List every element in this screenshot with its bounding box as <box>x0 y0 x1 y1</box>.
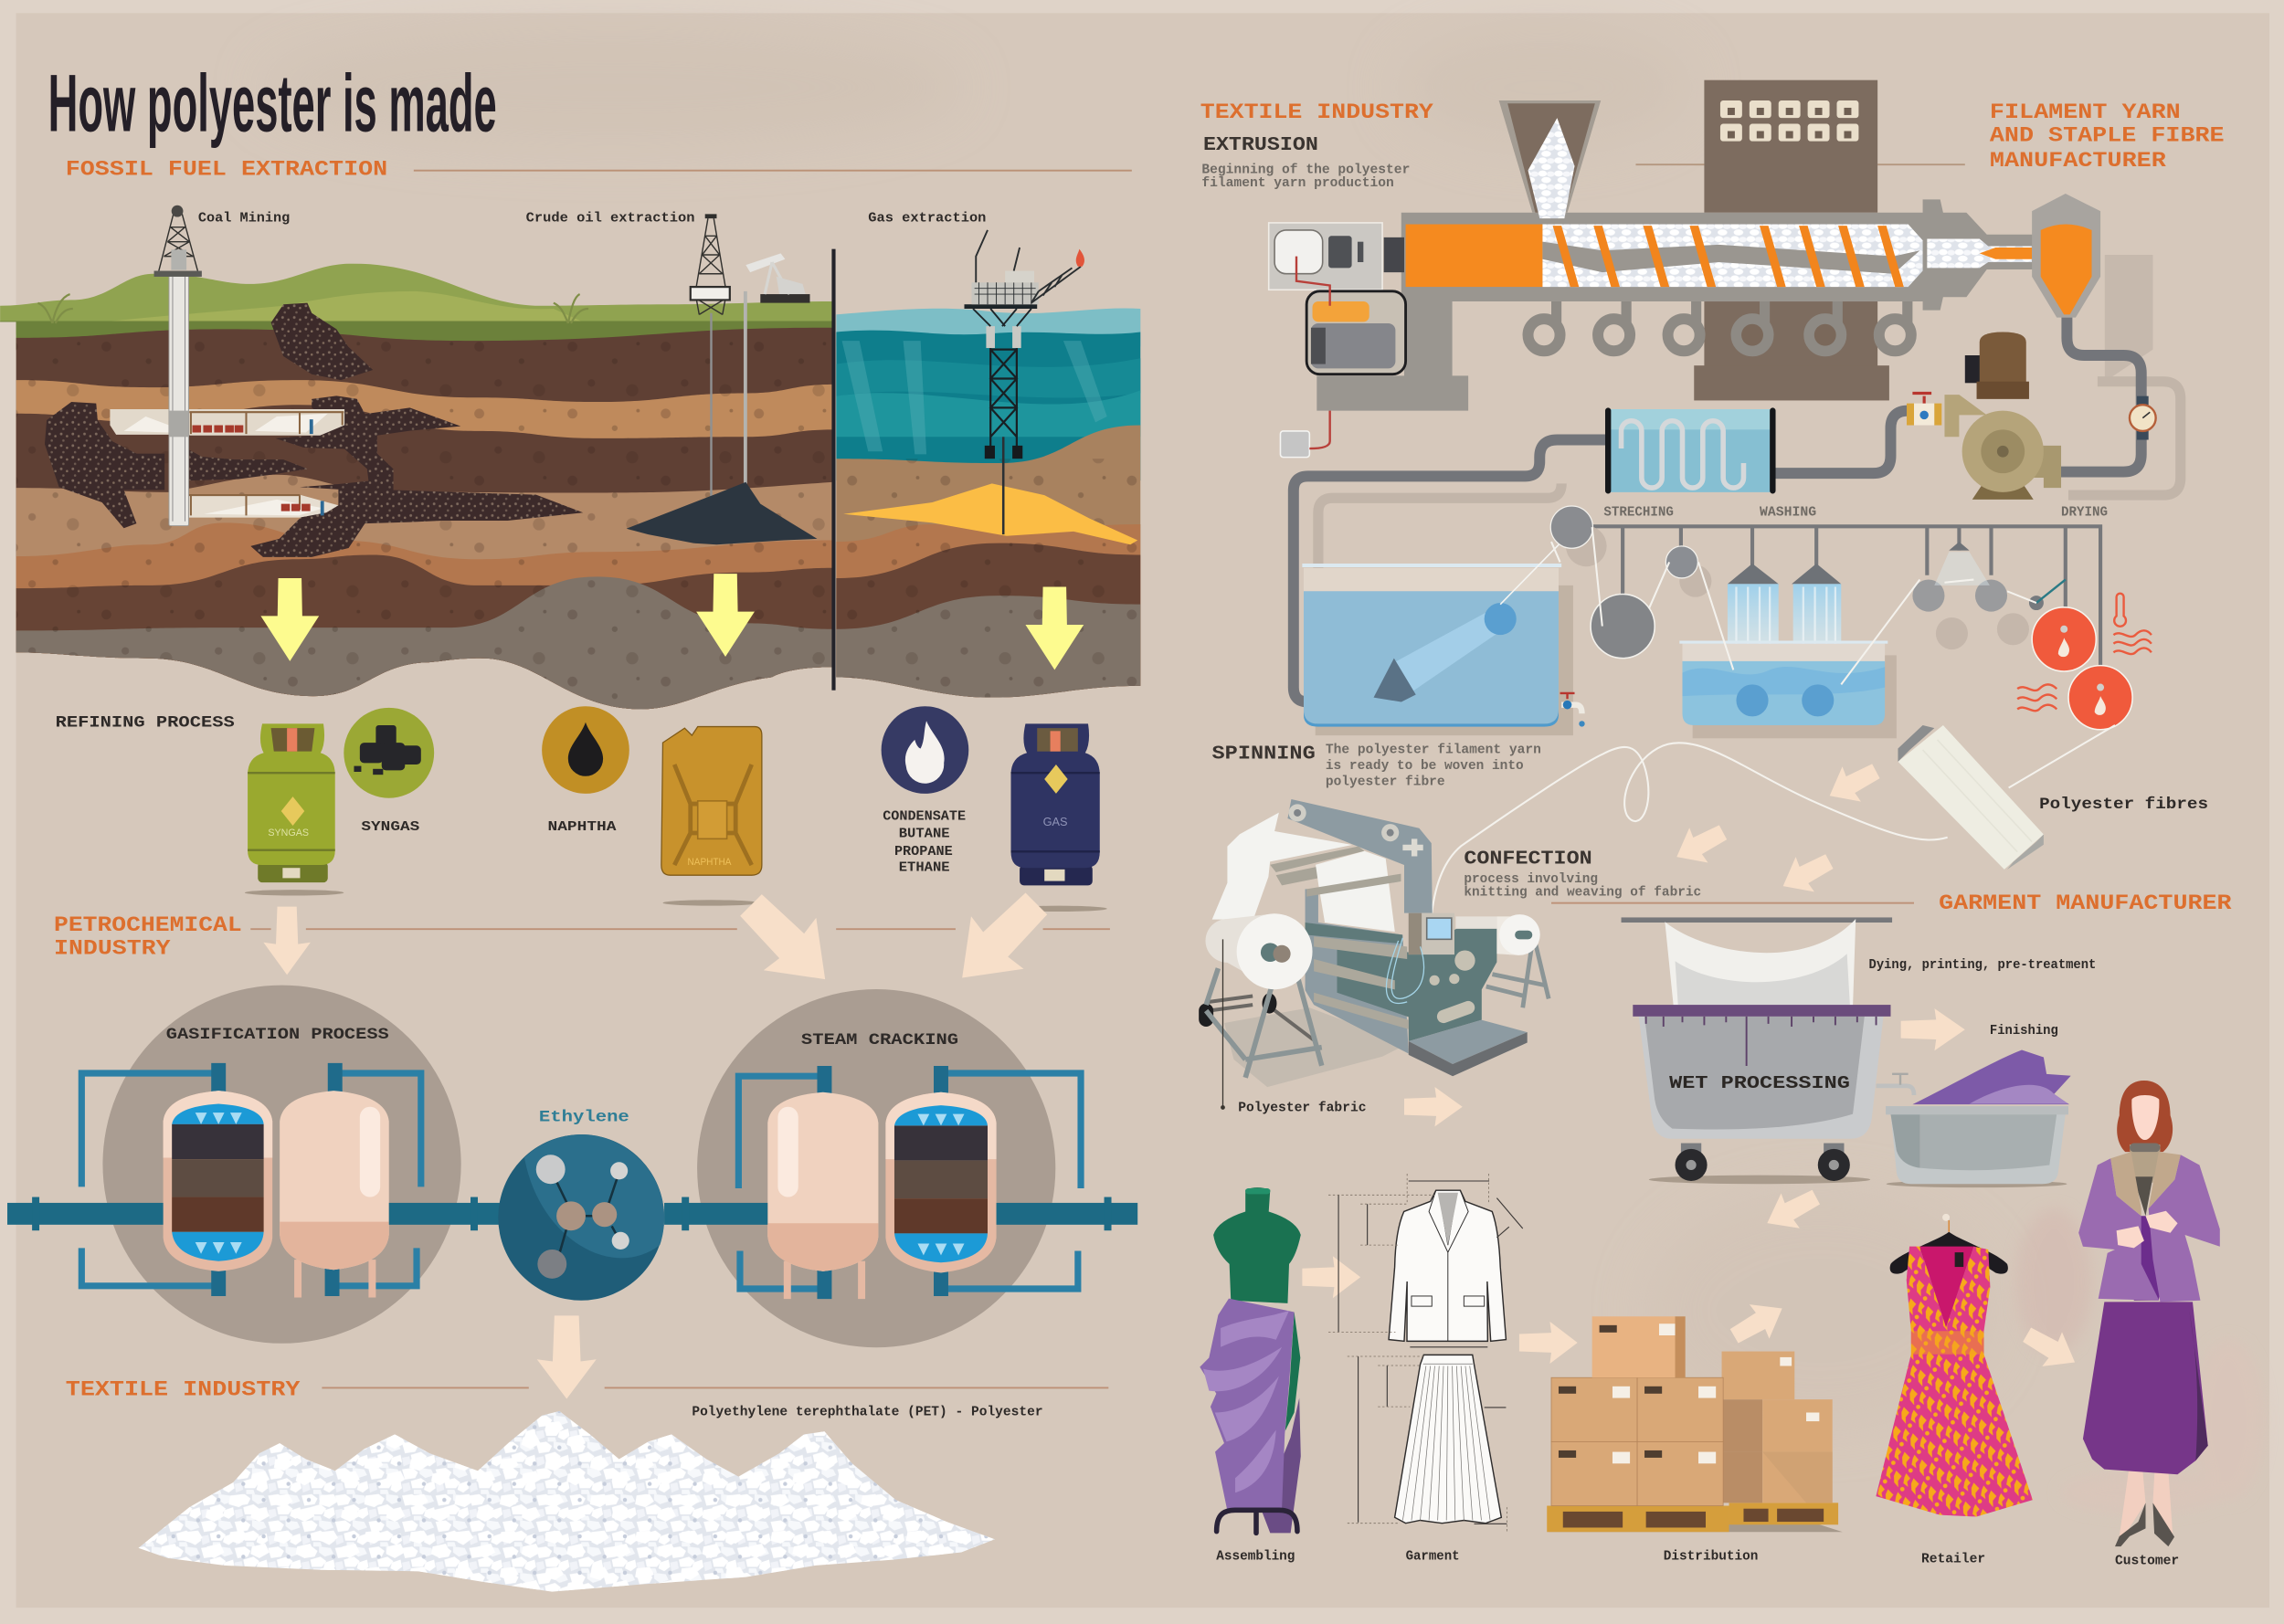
naphtha jerry can <box>661 727 762 906</box>
panel: steam cracking <box>697 989 1081 1347</box>
description: spinning <box>1326 741 1541 789</box>
label: PET polyester: Polyethylene terephthalate (PET) - Polyester <box>692 1404 1043 1420</box>
coal mine shaft and tower <box>154 206 202 526</box>
arrow: finishing to assembling <box>1758 1180 1825 1240</box>
garment: white jacket with dimensions <box>1328 1174 1523 1347</box>
label: gas products: CONDENSATE <box>883 808 966 825</box>
refining process label: REFINING PROCESS <box>56 714 235 733</box>
heading: steam cracking: STEAM CRACKING <box>801 1031 958 1049</box>
heading: confection: CONFECTION <box>1464 848 1592 870</box>
process labels <box>1603 503 2108 520</box>
section heading: petrochemical industry <box>54 913 1110 960</box>
process labels: DRYING <box>2061 503 2108 520</box>
arrow: gas to steam cracking <box>936 878 1063 1004</box>
arrow: oil down <box>696 574 755 657</box>
gas cylinder: GAS <box>1043 815 1068 828</box>
gas icon flame <box>882 706 968 794</box>
syngas icon with coal <box>344 708 434 798</box>
label: finishing: Finishing <box>1990 1022 2058 1039</box>
extraction labels: Gas extraction <box>868 209 986 226</box>
panel: gasification process <box>81 986 461 1344</box>
arrow: fabric to wet processing <box>1404 1087 1463 1126</box>
generator <box>1306 291 1406 374</box>
naphtha jerry can: NAPHTHA <box>688 857 732 868</box>
extruder melt chamber <box>1406 225 1542 287</box>
label: dying printing: Dying, printing, pre-treatment <box>1869 956 2096 973</box>
description: spinning: polyester fibre <box>1326 773 1445 789</box>
ethylene molecule sphere <box>498 1134 664 1301</box>
front pallet <box>1547 1506 1729 1532</box>
description: spinning: The polyester filament yarn <box>1326 741 1541 757</box>
section heading: filament yarn manufacturer: FILAMENT YARN <box>1990 100 2181 124</box>
divider between land and sea <box>831 249 836 691</box>
land strata <box>0 248 838 731</box>
arrow: gas down <box>1025 587 1084 670</box>
naphtha icon drop <box>542 706 629 794</box>
section heading: textile industry: TEXTILE INDUSTRY <box>66 1377 301 1401</box>
heat exchanger <box>1605 407 1776 493</box>
wall socket <box>1280 257 1330 458</box>
label: assembling: Assembling <box>1216 1548 1295 1565</box>
arrow: yarn to loom 2 <box>1773 844 1839 903</box>
distribution: stacked cardboard boxes on pallets <box>1547 1316 1843 1532</box>
legs and shoes <box>2120 1471 2173 1536</box>
oil derrick and wells <box>691 214 747 540</box>
section heading: petrochemical industry: INDUSTRY <box>54 936 171 960</box>
extruder heater rings <box>1528 299 1912 351</box>
extraction labels: Coal Mining <box>198 209 290 226</box>
hands <box>2117 1211 2178 1248</box>
label: wet processing: WET PROCESSING <box>1669 1073 1850 1093</box>
loom rear frame <box>1209 997 1316 1041</box>
reactor tank <box>767 1066 941 1299</box>
mine tunnels with wagons and miners <box>110 409 344 518</box>
garment: white pleated skirt with dimensions <box>1348 1355 1507 1532</box>
retailer: dress on hanger <box>1876 1214 2033 1516</box>
control cabinet with switches <box>1694 80 1889 400</box>
description: extrusion: Beginning of the polyester <box>1201 162 1410 178</box>
main polymer pipe <box>1294 318 2141 701</box>
label: distribution: Distribution <box>1664 1548 1758 1565</box>
section heading: filament yarn manufacturer: AND STAPLE FIBRE <box>1990 124 2225 148</box>
heading: spinning: SPINNING <box>1212 743 1316 765</box>
arrow: retailer to customer <box>2017 1317 2085 1379</box>
extruder support <box>1316 299 1468 411</box>
label: gas products: PROPANE <box>894 843 953 859</box>
arrow: ethylene to textile <box>537 1315 597 1399</box>
main process pipeline <box>7 1197 1137 1230</box>
white yarn threads <box>1432 527 2115 913</box>
description: spinning: is ready to be woven into <box>1326 757 1524 774</box>
filter tank <box>885 1092 997 1272</box>
description: extrusion: filament yarn production <box>1201 174 1394 191</box>
gas cylinder <box>1011 723 1107 912</box>
sea strata <box>836 303 1142 728</box>
label: polyester fabric with leader <box>1221 939 1367 1115</box>
shower heads <box>1728 542 1990 666</box>
arrow: assembling to garment <box>1302 1256 1360 1298</box>
wet processing tub with cloth <box>1622 917 1892 1184</box>
process labels: WASHING <box>1760 503 1816 520</box>
arrow: yarn to loom 1 <box>1667 815 1732 874</box>
drive motor <box>1269 223 1404 290</box>
description: extrusion <box>1201 162 1410 191</box>
washing tank <box>1679 641 1897 738</box>
pipes left unit <box>81 1073 421 1286</box>
section heading: garment manufacturer: GARMENT MANUFACTURER <box>1939 891 2232 915</box>
weaving loom machine <box>1199 799 1549 1087</box>
pipes right unit <box>738 1073 1081 1289</box>
skirt <box>2083 1302 2208 1474</box>
label: retailer: Retailer <box>1921 1551 1985 1567</box>
silo <box>2032 194 2152 382</box>
section heading: fossil fuel extraction: FOSSIL FUEL EXTRACTION <box>66 157 387 181</box>
grass tufts <box>37 294 588 323</box>
arrow: syngas to gasification <box>263 907 311 975</box>
label: gas products: ETHANE <box>899 859 950 875</box>
loom right fabric roll <box>1455 914 1549 1007</box>
pressure gauge <box>2130 396 2156 439</box>
customer: woman in purple suit <box>2078 1081 2220 1546</box>
gas reservoir <box>843 483 1137 544</box>
description: confection <box>1464 870 1701 901</box>
loom control panel <box>1409 913 1454 954</box>
PET pellet pile <box>139 1411 995 1592</box>
jacket <box>2078 1158 2159 1301</box>
drying and washing rail <box>1585 526 2100 696</box>
label: garment: Garment <box>1406 1548 1460 1565</box>
title: How polyester is made <box>48 57 497 148</box>
pipe shadow <box>1318 382 2181 696</box>
loom left fabric roll <box>1206 913 1322 1078</box>
back pallet <box>1729 1503 1838 1524</box>
extraction labels: Crude oil extraction <box>526 209 695 226</box>
arrow: garment to distribution <box>1519 1322 1578 1364</box>
face <box>2131 1095 2159 1140</box>
hopper with pellets <box>1499 100 1601 218</box>
pumpjack <box>745 253 809 303</box>
plain reactor tank <box>280 1091 389 1298</box>
heading: gasification: GASIFICATION PROCESS <box>166 1026 389 1044</box>
coal seams <box>45 303 583 557</box>
section heading: filament yarn manufacturer: MANUFACTURER <box>1990 149 2166 173</box>
heat icon: thermometer and waves <box>2017 594 2152 711</box>
panel: fossil fuel geology cross-section <box>0 206 1142 731</box>
label: polyester fibres: Polyester fibres <box>2039 796 2208 814</box>
label: syngas: SYNGAS <box>361 818 419 835</box>
process labels: STRECHING <box>1603 503 1674 520</box>
label: gas products: BUTANE <box>899 826 950 842</box>
label: naphtha: NAPHTHA <box>548 818 618 835</box>
label: customer: Customer <box>2115 1552 2179 1568</box>
water tap <box>1560 693 1585 727</box>
spinning bath <box>1302 536 1573 735</box>
extraction labels <box>198 209 986 226</box>
description: confection: knitting and weaving of fabric <box>1464 884 1701 901</box>
valve <box>1907 393 1941 426</box>
extruder screw <box>1542 225 1923 287</box>
section heading: textile industry right: TEXTILE INDUSTRY <box>1200 100 1433 124</box>
arrow: naphtha to steam cracking <box>724 879 851 1006</box>
filter tank <box>164 1063 335 1296</box>
back stack boxes <box>1722 1352 1833 1503</box>
section heading: petrochemical industry: PETROCHEMICAL <box>54 913 242 937</box>
polyester yarn spool <box>1898 725 2044 870</box>
roller set <box>1550 506 2066 659</box>
arrow: coal down <box>260 578 319 661</box>
arrow: distribution to retailer <box>1724 1292 1792 1354</box>
label: polyester fabric with leader: Polyester fabric <box>1238 1099 1367 1115</box>
description: confection: process involving <box>1464 870 1598 887</box>
section heading: filament yarn manufacturer <box>1635 100 2225 173</box>
syngas cylinder: SYNGAS <box>268 828 309 838</box>
hair <box>2117 1081 2173 1152</box>
heading: extrusion: EXTRUSION <box>1203 134 1318 156</box>
label: ethylene: Ethylene <box>539 1109 629 1127</box>
arrow: wet to finishing <box>1901 1008 1965 1050</box>
oil reservoir <box>627 482 817 544</box>
finishing tub with purple fabric <box>1877 1050 2071 1187</box>
red drying rollers <box>2032 607 2132 730</box>
mannequin with draped fabric <box>1200 1187 1301 1533</box>
arrow: spool to confection <box>1821 754 1886 813</box>
loom body <box>1306 889 1409 1053</box>
scarf and inner top <box>2130 1144 2160 1186</box>
front stack boxes <box>1551 1377 1723 1506</box>
extruder barrel casing <box>1401 199 2034 311</box>
label: gas products <box>883 808 966 875</box>
extruder machine <box>1269 100 2034 458</box>
pump assembly <box>1944 332 2061 500</box>
extruder nozzle <box>1927 238 2032 268</box>
offshore gas platform <box>964 230 1084 534</box>
syngas cylinder <box>245 723 344 896</box>
